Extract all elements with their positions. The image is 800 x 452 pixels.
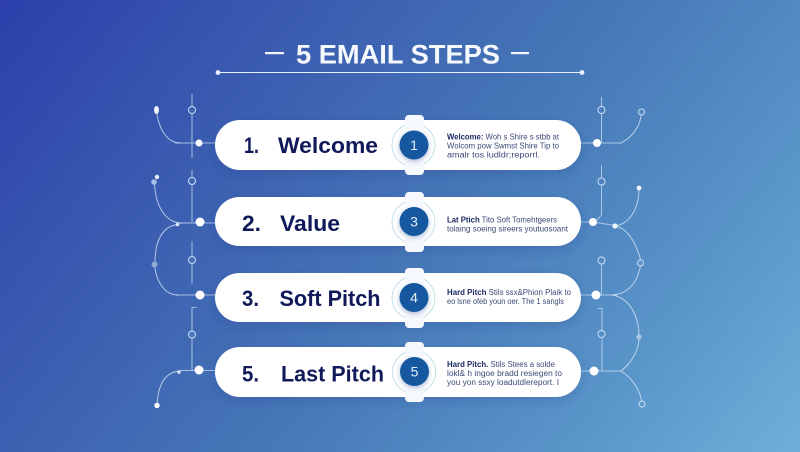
- step row 4: Last Pitch: [215, 342, 581, 402]
- pill: [215, 197, 581, 246]
- title right dash: [511, 52, 529, 54]
- description: [447, 216, 569, 234]
- description: [447, 360, 563, 387]
- badge: 4: [410, 290, 418, 306]
- number label: 1.: [244, 133, 259, 158]
- step name: Value: [280, 211, 340, 236]
- badge: 1: [410, 137, 418, 153]
- step row 1: Welcome: [215, 115, 581, 175]
- number label: 2.: [242, 211, 261, 236]
- description: Welcome: Woh s Shire s stbb at: [447, 132, 560, 142]
- step row 2: Value: [215, 192, 581, 252]
- description: [447, 132, 560, 160]
- description: eo lsne ofeb youn oer. The 1 sangls: [447, 297, 564, 306]
- description: lokl& h ingoe bradd resiegen to: [447, 369, 563, 378]
- description: Hard Pitch Stils ssx&Phion Plaik to: [447, 288, 572, 297]
- right connector network: [580, 97, 645, 407]
- description: [447, 288, 572, 306]
- step name: Last Pitch: [281, 362, 384, 386]
- pill: [215, 120, 581, 170]
- badge: 5: [411, 364, 419, 380]
- title: 5 EMAIL STEPS: [296, 40, 500, 70]
- step row 3: Soft Pitch: [215, 268, 581, 328]
- description: amalr tos ludldr;reporrl.: [447, 150, 540, 160]
- description: you yon ssxy loadutdlereport. I: [447, 378, 559, 387]
- step name: Welcome: [278, 133, 378, 158]
- badge: [392, 268, 435, 328]
- number label: 5.: [242, 362, 259, 386]
- badge: 3: [410, 214, 418, 230]
- badge: [392, 115, 435, 175]
- badge: [392, 192, 435, 252]
- badge: [392, 342, 436, 402]
- step name: Soft Pitch: [280, 286, 380, 311]
- description: tolaing soeing sireers youtuosoant: [447, 224, 569, 234]
- number label: 3.: [242, 286, 259, 311]
- title block: [216, 40, 584, 75]
- pill: [215, 347, 581, 397]
- title left dash: [265, 52, 284, 54]
- title underline: [216, 70, 584, 75]
- pill: [215, 273, 581, 322]
- description: Lat Ptich Tito Soft Tomehtgeers: [447, 216, 557, 224]
- description: Hard Pitch. Stils Stees a solde: [447, 360, 556, 369]
- description: Wolcom pow Swmst Shire Tip to: [447, 142, 560, 150]
- left connector network: [151, 94, 215, 408]
